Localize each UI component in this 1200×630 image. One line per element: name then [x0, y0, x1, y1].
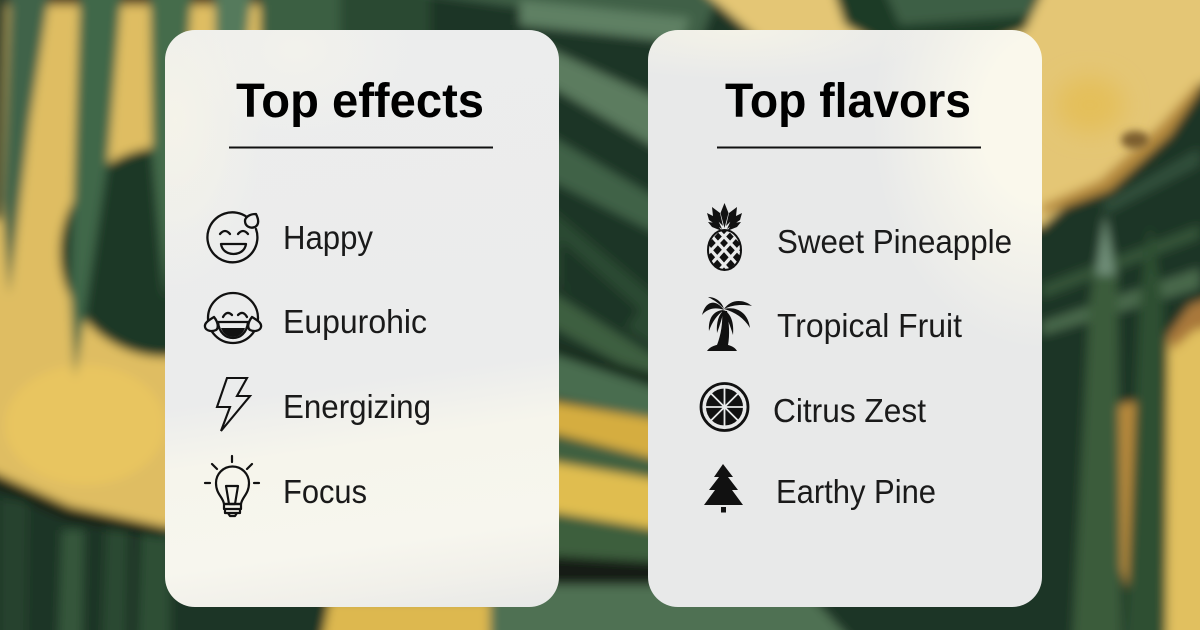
- heading: top effects: Top effects: [236, 75, 484, 128]
- lower-left vertical stripes: [0, 500, 28, 630]
- icon: citrus slice: [701, 384, 748, 430]
- panel: top flavors: [698, 75, 1012, 512]
- small yellow piece: [1118, 400, 1142, 590]
- middle gap leaves: [540, 45, 660, 150]
- icon: light bulb: [205, 456, 259, 516]
- label: Sweet Pineapple: Sweet Pineapple: [777, 224, 1012, 261]
- label: Energizing: Energizing: [283, 389, 431, 426]
- panel: top flavors background: [648, 30, 1042, 607]
- top centre leaves: [400, 0, 720, 42]
- right horizontal leaves: [1042, 225, 1200, 298]
- heading: top flavors: Top flavors: [725, 75, 971, 128]
- right pineapple: [1166, 295, 1200, 630]
- icon: laughing face with tears: [205, 293, 261, 343]
- left ring: [0, 0, 470, 527]
- label: Tropical Fruit: Tropical Fruit: [777, 308, 963, 345]
- icon: happy face: [207, 212, 258, 262]
- label: Happy: Happy: [283, 220, 373, 257]
- label: Earthy Pine: Earthy Pine: [776, 474, 936, 511]
- icon: palm tree: [702, 297, 752, 351]
- vertical leaves: [1072, 212, 1122, 630]
- label: Focus: Focus: [283, 474, 367, 511]
- top right ring: [690, 0, 1200, 228]
- icon: lightning bolt: [217, 378, 250, 431]
- label: Citrus Zest: Citrus Zest: [773, 393, 927, 430]
- icon: pine tree: [704, 464, 743, 512]
- panel: top effects: [205, 75, 493, 516]
- icon: pineapple: [707, 203, 742, 271]
- label: Eupurohic: Eupurohic: [283, 304, 427, 341]
- left leaves: [2, 0, 50, 295]
- panel: top effects background: [165, 30, 559, 607]
- panel content: headings, lists and icons: [204, 82, 1011, 518]
